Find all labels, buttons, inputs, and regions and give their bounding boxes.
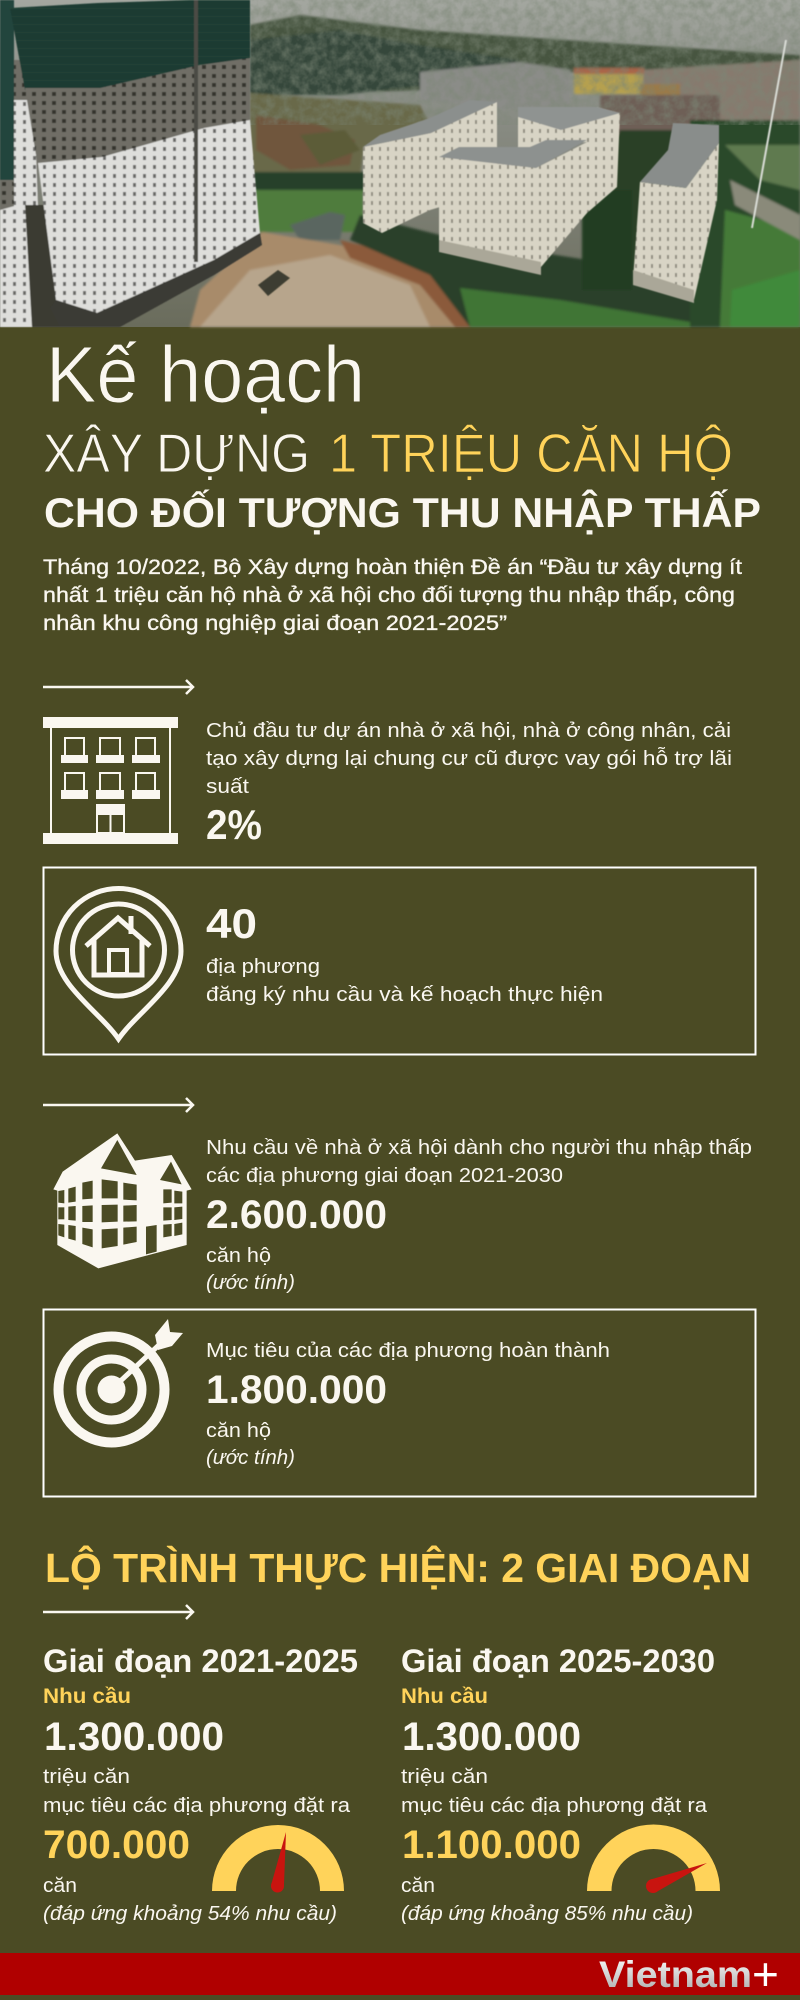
pole: [752, 40, 786, 228]
logo: Vietnam+: +: [752, 1948, 779, 2000]
panel: phase 2021-2025: căn: [43, 1874, 77, 1897]
panel: phase 2025-2030: căn: [401, 1874, 435, 1897]
arrow: [43, 1098, 193, 1112]
intro paragraph: Tháng 10/2022, Bộ Xây dựng hoàn thiện Đề án “Đầu tư xây dựng ít: [43, 556, 742, 579]
logo: Vietnam+: [599, 1948, 779, 2000]
intro paragraph: [43, 556, 742, 635]
title: XÂY DỰNG: [43, 422, 310, 484]
far left towers: [0, 60, 38, 210]
text: housing demand: (ước tính): [206, 1271, 295, 1294]
text: housing demand: các địa phương giai đoạn 2021-2030: [206, 1164, 563, 1187]
arrow: [43, 1605, 193, 1619]
text: 40 localities: đăng ký nhu cầu và kế hoạch thực hiện: [206, 983, 603, 1006]
icon: target with arrow: [58, 1319, 183, 1442]
icon: house block: [53, 1133, 192, 1268]
footer bar with logo: [0, 1948, 800, 2000]
panel: phase 2021-2025: Nhu cầu: [43, 1685, 131, 1708]
text: local targets: [206, 1339, 610, 1469]
main tower: [10, 0, 250, 92]
title: [43, 330, 761, 536]
panel: local targets: [44, 1310, 756, 1496]
panel: phase 2021-2025: Giai đoạn 2021-2025: [43, 1643, 358, 1679]
text: interest rate support: [206, 719, 732, 848]
logo: Vietnam+: Vietnam: [599, 1954, 752, 1995]
apartment blocks: [518, 107, 620, 213]
text: local targets: 1.800.000: [206, 1368, 387, 1412]
panel: phase 2025-2030: [401, 1643, 720, 1925]
panel: phase 2021-2025: [43, 1643, 358, 1925]
panel: phase 2025-2030: triệu căn: [401, 1765, 488, 1788]
panel: phase 2025-2030: (đáp ứng khoảng 85% nhu cầu): [401, 1902, 693, 1925]
text: housing demand: căn hộ: [206, 1244, 271, 1267]
icon: apartment building: [43, 717, 178, 844]
panel: 40 localities: [44, 868, 756, 1054]
panel: phase 2021-2025: 1.300.000: [44, 1715, 224, 1759]
panel: phase 2025-2030: mục tiêu các địa phương đặt ra: [401, 1794, 708, 1817]
text: 40 localities: địa phương: [206, 955, 320, 978]
text: 40 localities: [206, 900, 603, 1006]
intro paragraph: nhất 1 triệu căn hộ nhà ở xã hội cho đối tượng thu nhập thấp, công: [43, 584, 735, 607]
text: local targets: Mục tiêu của các địa phương hoàn thành: [206, 1339, 610, 1362]
panel: phase 2025-2030: Nhu cầu: [401, 1685, 488, 1708]
text: housing demand: [206, 1136, 752, 1294]
text: interest rate support: Chủ đầu tư dự án nhà ở xã hội, nhà ở công nhân, cải: [206, 719, 731, 742]
panel: phase 2021-2025: mục tiêu các địa phương đặt ra: [43, 1794, 351, 1817]
panel: phase 2021-2025: triệu căn: [43, 1765, 130, 1788]
gauge: 85%: [587, 1824, 720, 1893]
text: housing demand: Nhu cầu về nhà ở xã hội dành cho người thu nhập thấp: [206, 1136, 752, 1159]
panel: phase 2025-2030: Giai đoạn 2025-2030: [401, 1643, 715, 1679]
text: local targets: căn hộ: [206, 1419, 271, 1442]
panel: phase 2021-2025: 700.000: [43, 1823, 190, 1867]
arrow: [43, 680, 193, 694]
panel: phase 2025-2030: 1.100.000: [402, 1823, 581, 1867]
text: housing demand: 2.600.000: [206, 1193, 387, 1237]
title: CHO ĐỐI TƯỢNG THU NHẬP THẤP: [44, 488, 761, 536]
text: interest rate support: tạo xây dựng lại chung cư cũ được vay gói hỗ trợ lãi: [206, 747, 732, 770]
panel: phase 2021-2025: (đáp ứng khoảng 54% nhu cầu): [43, 1902, 337, 1925]
intro paragraph: nhân khu công nghiệp giai đoạn 2021-2025”: [43, 612, 507, 635]
text: 40 localities: 40: [206, 900, 257, 947]
icon: location pin with house: [56, 889, 181, 1039]
title: Kế hoạch: [46, 330, 365, 419]
text: interest rate support: suất: [206, 775, 249, 798]
text: interest rate support: 2%: [206, 801, 262, 848]
panel: phase 2025-2030: 1.300.000: [402, 1715, 581, 1759]
town texture: [250, 0, 800, 125]
title: 1 TRIỆU CĂN HỘ: [329, 422, 733, 484]
gauge: 54%: [212, 1825, 344, 1892]
heading: roadmap: LỘ TRÌNH THỰC HIỆN: 2 GIAI ĐOẠN: [45, 1545, 751, 1591]
text: local targets: (ước tính): [206, 1446, 295, 1469]
photo: aerial view of apartment towers: [0, 0, 800, 327]
